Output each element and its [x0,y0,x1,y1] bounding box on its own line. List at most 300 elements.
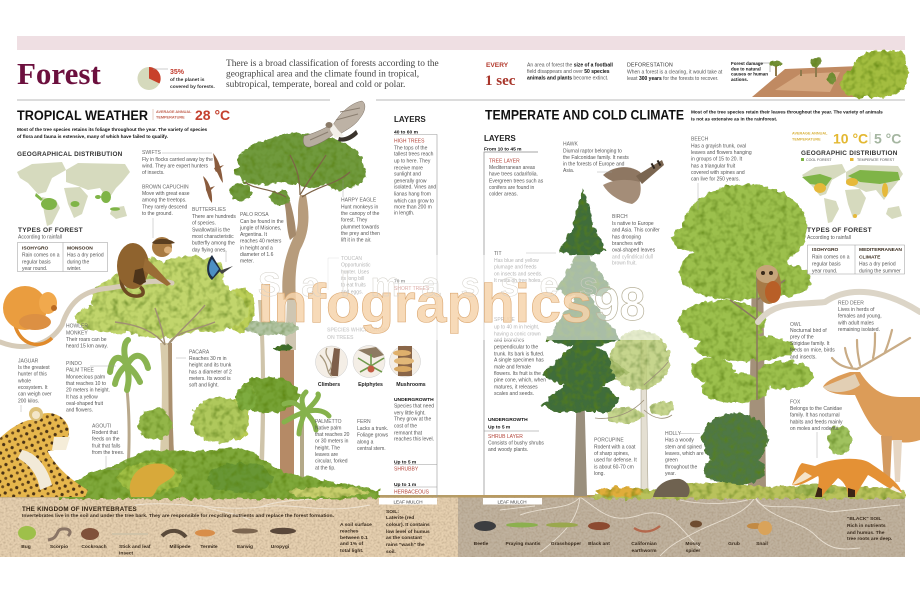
note: soil light: reaches [340,528,359,534]
tropical layers column: which can grow to [394,198,434,204]
table: tropical forest types: year round. [22,266,47,272]
callout: pacara: PACARA [189,349,210,355]
callout: harpy eagle: Hunt monkeys in [341,204,378,210]
temperate layers column: From 10 to 45 m [484,146,522,152]
fox [792,459,902,497]
callout: pacara: soft and light. [189,383,219,389]
callout: toucan: Opportunistic [341,263,371,269]
invertebrate row left: Stick and leaf [119,544,151,550]
callout: pindo palm [66,361,116,414]
callout: birch: and cylindrical dull [612,254,653,260]
table: tropical forest types: regular basis [22,260,51,266]
callout: palmetto: or 30 meters in [315,439,349,445]
foliage mid storey [223,287,299,441]
pie chart: 35% of the planet [138,67,168,90]
callout: fox [790,399,843,458]
owl [756,265,781,304]
table: temperate forest types: during the summer [859,268,901,274]
invertebrate row left: Bug [21,544,31,550]
callout: palmetto: at the tip. [315,465,336,471]
callout: toucan: TOUCAN [341,256,362,262]
callout: butterflies: of species. [192,221,216,227]
capuchin monkey [117,237,175,296]
callout: fern [357,419,389,452]
callout: palo rosa: Argentina. It [240,232,268,238]
spruce tree [541,188,628,496]
table: tropical forest types: during the [67,260,89,266]
heading: types of forest (temperate): TYPES OF FOREST [807,227,872,234]
callout: tit: It nests on tree holes. [494,278,542,284]
tropical layers column [394,115,437,497]
callout: pindo palm: that reaches 10 to [66,381,106,387]
red deer [823,330,920,482]
forest damage caption [731,61,770,82]
temperate layers column: SHRUB LAYER [488,434,523,440]
callout: howler monkey [66,324,108,350]
callout: birch: oval-shaped leaves [612,248,656,254]
callout: toucan [328,256,371,295]
left forest floor [0,495,458,498]
callout: jaguar [18,358,52,412]
invertebrate row right [474,520,772,554]
callout: beech: Has a grayish trunk, oval [691,143,746,149]
callout: pacara: height and its trunk [189,363,232,369]
callout: birch: brown fruit. [612,260,637,266]
callout: butterflies: There are hundreds [192,214,236,220]
callout: jaguar: whole [18,378,31,384]
callout: hawk: in the forests of Europe and [563,162,625,168]
callout: porcupine: PORCUPINE [594,438,624,444]
tropical layers column: UNDERGROWTH [394,397,434,403]
temperate layers column: and woody plants. [488,447,528,453]
callout: fern: central stem. [357,446,386,452]
tropical layers column: in length. [394,211,414,217]
tropical layers column: isolated. Vines and [394,185,436,191]
callout: agouti [92,423,124,469]
every 1 second stat: 1 sec [485,73,516,89]
harpy eagle [303,101,365,147]
callout: beech: leaves and flowers hanging [691,150,752,156]
callout: spruce: scales and seeds. [494,391,534,397]
callout: pindo palm: PINDO [66,361,82,367]
callout: spruce: A single specimen has [494,358,544,364]
callout: butterflies: day flying ones. [192,247,227,253]
callout: harpy eagle: the canopy of the [341,211,380,217]
tropical layers column: receive more [394,165,423,171]
callout: red deer: RED DEER [838,300,864,306]
tropical layers column: very little light. [394,410,426,416]
callout: spruce: having a conic crown [494,332,541,338]
callout: tit: Has blue and yellow [494,258,539,264]
table: tropical forest types [18,242,108,272]
illustration: cleared forest [752,50,908,98]
heading: geographical distribution: GEOGRAPHICAL DISTRIBUTION [17,151,123,158]
deforestation rate text: field disappears and over 50 species [527,69,610,75]
callout: agouti: fruit that falls [92,443,121,449]
note: soil light: total light. [340,548,364,554]
invertebrate row left: Cockroach [81,544,107,550]
tropical layers column: sunlight and [394,172,421,178]
birch tree [595,330,674,490]
note: soil light: and 1% of [340,541,363,547]
callout: pacara [176,349,232,389]
callout: swifts: wind. They are expert hunters [142,164,209,170]
callout: spruce: perpendicular to the [494,345,538,351]
callout: toucan: and eggs. [341,289,363,295]
note: laterite soil: colour). It contains [386,522,430,528]
callout: palmetto [315,419,350,471]
callout: palo rosa: jungle of Misiones, [239,226,281,232]
callout: fern: along a [357,439,374,445]
tropical layers column: The tops of the [394,145,428,151]
invertebrate row right: Praying mantis [505,541,541,547]
callout: spruce: male and female [494,364,531,370]
callout: toucan: its long bill [341,276,364,282]
watermark: Infographics [258,272,592,334]
icon: mushrooms [390,346,420,377]
callout: holly: Has a woody [665,438,694,444]
callout: fox: family. It has nocturnal [790,413,840,419]
callout: howler monkey: MONKEY [66,330,88,336]
callout: porcupine: long. [594,471,605,477]
callout: holly: throughout the [665,464,697,470]
callout: harpy eagle: plummet towards [341,224,380,230]
callout: spruce: flowers. Its fruit is the [494,371,541,377]
temperate layers column: Consists of bushy shrubs [488,441,544,447]
table: temperate forest types: Has a dry period [859,262,896,268]
callout: beech: BEECH [691,137,709,143]
note: soil light: between 0.1 [340,535,368,541]
note: laterite soil: soil. [386,549,396,555]
callout: swifts: Fly in flocks carried away by the [142,157,213,163]
temperate temperature [792,130,901,146]
leaf mulch label left [379,498,437,504]
callout: hawk: the Falconidae family. It nests [563,155,629,161]
callout: beech [691,137,752,210]
callout: spruce: up to 40 m in height, [494,324,539,330]
callout: harpy eagle: lift it in the air. [341,238,372,244]
callout: red deer: females and young, [838,314,882,320]
species growing on trees: ON TREES [327,335,354,341]
invertebrate row right: Mossy [685,541,701,547]
callout: brown capuchin: They rarely descend [142,204,188,210]
callout: butterflies: Swallowtail is the [192,227,230,233]
tit/hawk bird [603,160,664,204]
callout: brown capuchin: BROWN CAPUCHIN [142,184,189,190]
heading: types of forest (temperate) [807,227,872,241]
temperate temperature: AVERAGE ANNUAL [792,132,828,136]
header rule left [17,99,330,101]
roots in soil [135,497,900,556]
invertebrate row left: insect [119,550,134,556]
statistic: 35 percent covered: 35% [170,69,185,76]
tropical temperature [153,107,230,123]
tropical layers column: 40 to 60 m [394,130,419,136]
species growing on trees: Climbers [318,382,340,388]
invertebrate row left: Termite [200,544,218,550]
callout: palmetto: circular, forked [315,459,348,465]
callout: palo rosa [239,212,284,265]
table: temperate forest types: Rain comes on a [812,254,850,260]
callout: porcupine: Rodent with a coat [594,444,636,450]
callout: owl: and insects. [790,354,817,360]
callout: palmetto: leaves are [315,452,338,458]
callout: tit: plumage and feeds [494,265,537,271]
jaguar [0,407,88,497]
howler monkey [3,286,57,344]
callout: owl: Nocturnal bird of [790,328,827,334]
table: tropical forest types: ISOHYGRO [22,246,49,252]
table: temperate forest types: MEDITERRANEAN [859,247,902,253]
callout: palmetto: height. The [315,445,340,451]
invertebrate row left: Uropygi [271,544,290,550]
callout: birch: BIRCH [612,214,628,220]
temperate description [691,110,883,122]
invertebrate row left: Millipede [170,544,191,550]
callout: tit: on insects and seeds. [494,271,542,277]
callout: jaguar: can weigh over [18,392,52,398]
tropical layers column: 70 m [394,278,406,284]
note: black soil: tree roots are deep. [847,536,893,542]
temperate layers column: Mediterranean areas [489,165,536,171]
note: laterite soil: as the constant [386,535,422,541]
invertebrate row right: earthworm [631,548,657,554]
deforestation recovery text: least 300 years for the forests to recover. [627,76,718,82]
statistic: 35 percent covered [170,69,215,90]
callout: holly: year. [665,471,676,477]
callout: spruce: matures, it releases [494,384,538,390]
callout: howler monkey: HOWLER [66,324,88,330]
note: laterite soil: Laterite (red [386,515,414,521]
header rule right [376,99,905,101]
callout: beech: has a triangular fruit [691,163,736,169]
callout: fox: Belongs to the Canidae [790,406,842,412]
callout: owl: OWL [790,322,802,328]
tropical layers column: LAYERS [394,115,426,124]
table: tropical forest types: Rain comes on a [22,252,60,258]
undergrowth left [60,447,380,499]
table: temperate forest types: year round. [812,268,837,274]
callout: swifts: SWIFTS [142,150,162,156]
tree: palo rosa with harpy perch [230,133,366,300]
every 1 second stat: EVERY [486,62,509,69]
callout: butterflies: butterfly among the [192,241,235,247]
porcupine [653,479,690,497]
callout: palmetto: PALMETTO [315,419,342,425]
callout: agouti: from the trees. [92,450,124,456]
callout: spruce [494,317,546,397]
forest damage caption: causes or human [731,72,768,77]
callout: howler monkey: heard 15 km away. [66,344,108,350]
callout: pindo palm: and flowers. [66,408,93,414]
deforestation recovery text [627,62,723,82]
temperate layers column: UNDERGROWTH [488,417,528,423]
tropical layers column: more than 200 m [394,205,432,211]
statistic: 35 percent covered: covered by forests. [170,84,215,90]
callout: agouti: AGOUTI [92,423,111,429]
callout: owl [790,322,835,360]
climbing branch [0,281,172,347]
heading: types of forest (tropical): According to rainfall [18,234,62,240]
undergrowth right [590,425,905,499]
callout: agouti: Rodent that [92,430,118,436]
callout: hawk: Asia. [563,168,574,174]
note: laterite soil [386,509,430,555]
callout: tit: TIT [494,251,502,257]
callout: holly: HOLLY [665,431,682,437]
note: soil light [340,522,372,554]
callout: pindo palm: oval-shaped fruit [66,401,104,407]
callout: pindo palm: 20 meters in height. [66,388,110,394]
intro text: geographical area and the climate found in tropical, [226,68,419,80]
callout: harpy eagle [341,180,380,244]
faded area behind watermark [320,255,660,340]
table: temperate forest types: regular basis [812,262,841,268]
callout: palo rosa: Can be found in the [240,219,284,225]
intro text: There is a broad classification of forests according to the [226,58,439,69]
tropical layers column: SHORT TREES [394,286,430,292]
heading: geographic distribution: GEOGRAPHIC DISTRIBUTION [801,150,898,157]
callout: palo rosa: PALO ROSA [240,212,269,218]
temperate layers column: colder areas. [489,192,518,198]
every 1 second stat [485,62,516,89]
callout: owl: prey of the [790,334,814,340]
callout: brown capuchin: to the ground. [142,211,173,217]
callout: red deer [838,300,882,333]
invertebrate row right: Californian [631,541,657,547]
temperate layers column: have trees cadarifolia. [489,172,538,178]
callout: swifts [142,150,213,176]
callout: palo rosa: reaches 40 meters [240,239,282,245]
tropical layers column: They grow at the [394,417,431,423]
callout: harpy eagle: HARPY EAGLE [341,198,377,204]
callout: owl: feeds on mice, birds [790,348,835,354]
agouti [130,463,175,497]
callout: red deer: remaining isolated. [838,327,880,333]
callout: pacara: has a diameter of 2 [189,369,232,375]
callout: beech: can live for 250 years. [691,177,740,183]
icon: climbers [316,346,348,378]
watermark: Salmasses [258,266,598,304]
callout: jaguar: ecosystem. It [18,385,48,391]
note: black soil [847,516,893,542]
invertebrates description: Invertebrates live in the soil and under the tree bark. They are responsible for recycling nutrients and replace the forest formation. [22,513,334,519]
callout: pindo palm: PALM TREE [66,368,95,374]
callout: palo rosa: in height and a [240,246,273,252]
callout: spruce: SPRUCE [494,317,516,323]
deforestation rate text [527,62,613,82]
temperate temperature: TEMPERATURE [792,138,821,142]
callout: fox: on moles and rodents. [790,426,839,432]
intro text [226,58,439,90]
title: Forest [17,56,101,91]
callout: butterflies: most characteristic [192,234,234,240]
heading: temperate and cold climate: TEMPERATE AND COLD CLIMATE [485,106,684,122]
pacara tree [75,256,248,455]
callout: birch [612,214,660,266]
tropical layers column: generally grow [394,179,427,185]
icon: epiphytes [353,346,385,378]
temperate temperature: 5 °C [874,130,901,146]
butterfly [207,255,233,280]
table: temperate forest types: ISOHYGRO [812,247,839,253]
table: temperate forest types [808,245,904,274]
header colour band [17,36,905,50]
soil band right [458,497,905,557]
invertebrate row left: Scorpio [50,544,68,550]
note: laterite soil: SOIL: [386,509,399,515]
temperate description: is not as extensive as in the rainforest. [691,116,777,122]
callout: butterflies: BUTTERFLIES [192,207,227,213]
callout: pindo palm: Monoecious palm [66,374,105,380]
tropical layers column: HIGH TREES [394,138,425,144]
deforestation rate text: An area of forest the size of a football [527,62,613,68]
birch branch [758,292,920,322]
callout: pindo palm: It has a yellow [66,394,98,400]
callout: spruce: pine cone, which, when [494,378,546,384]
callout: owl: Strigidae family. It [790,341,830,347]
tropical layers column: Up to 1 m [394,482,417,488]
soil band left [0,497,458,557]
callout: fox: FOX [790,399,801,405]
callout: brown capuchin: Move with great ease [142,191,190,197]
pindo palm [110,340,148,460]
callout: birch: Is native to Europe [612,221,654,227]
temperate description: Most of the tree species retain their leaves throughout the year. The variety of animals [691,110,883,114]
note: soil light: A soil surface [340,522,372,528]
table: tropical forest types: Has a dry period [67,252,104,258]
callout: fern: FERN [357,419,371,425]
callout: palmetto: that reaches 20 [315,432,350,438]
callout: hawk [563,142,629,174]
tropical layers column: lianas hang from [394,192,431,198]
tropical layers column: SHRUBBY [394,466,419,472]
callout: holly: stem and spined [665,444,702,450]
invertebrate row right: Black ant [588,541,610,547]
callout: red deer: with adult males [838,320,874,326]
table: tropical forest types: MONSOON [67,246,93,252]
heading: kingdom of invertebrates: THE KINGDOM OF INVERTEBRATES [22,506,137,513]
tree trunks mid storey [258,300,304,490]
callout: pacara: meters. Its wood is [189,376,231,382]
leaf mulch label right [483,498,542,504]
species growing on trees: Epiphytes [358,382,383,388]
species growing on trees: SPECIES WHICH GROW [327,328,387,334]
heading: types of forest (temperate): According to rainfall [807,235,851,241]
map legend [801,158,895,162]
callout: porcupine: is about 60-70 cm [594,464,634,470]
invertebrate row right: Grub [728,541,740,547]
tropical description: Most of the tree species retains its foliage throughout the year. The variety of species [17,127,208,132]
invertebrate row right: Snail [756,541,768,547]
deforestation recovery text: When a forest is a clearing, it would take at [627,69,723,75]
map legend: TEMPERATE FOREST [857,158,895,162]
callout: jaguar: hunter of this [18,372,47,378]
beech tree [672,184,813,490]
callout: harpy eagle: forest. They [341,218,368,224]
callout: palmetto: Native palm [315,426,341,432]
deforestation recovery text: DEFORESTATION [627,62,673,68]
temperate layers column: LAYERS [484,134,516,143]
heading: tropical weather: TROPICAL WEATHER [17,108,148,123]
callout: fox: habits and feeds mainly [790,419,843,425]
callout: birch: and Asia. This conifer [612,228,660,234]
callout: howler monkey: Their roars can be [66,337,107,343]
callout: tit [494,251,556,284]
callout: beech: covered with spines and [691,170,745,176]
callout: jaguar: 200 kilos. [18,398,39,404]
callout: harpy eagle: the prey and then [341,231,380,237]
